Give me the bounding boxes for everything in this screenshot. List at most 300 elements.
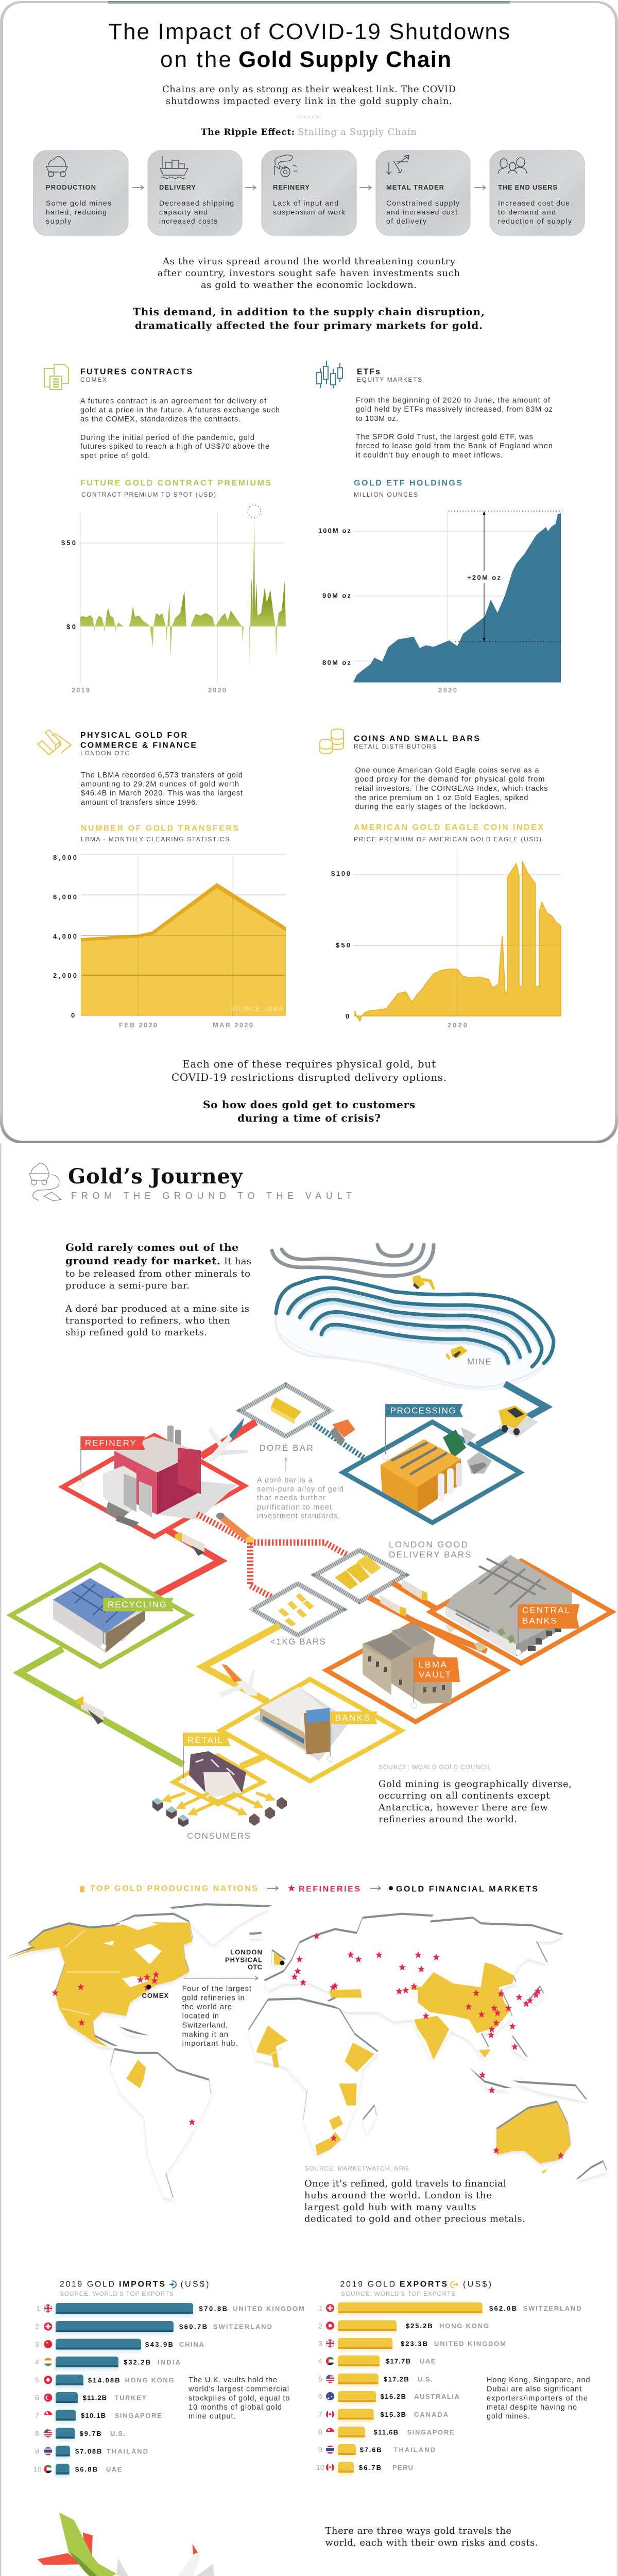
row 8: $9.7B xyxy=(80,2430,101,2437)
diamond: retail xyxy=(174,1733,263,1804)
diamond: refinery xyxy=(63,1426,244,1537)
row 4 xyxy=(35,2357,181,2367)
text: gold out of the ground: produce a semi-pure bar. xyxy=(65,1280,190,1291)
diamond: dore bar xyxy=(241,1385,330,1436)
note: hubs without mines xyxy=(487,2376,590,2421)
chart heading: SOURCE: WORLD'S TOP EXPORTS xyxy=(341,2290,455,2297)
row 5: 5 xyxy=(318,2375,322,2383)
note: hubs without mines: Hong Kong, Singapore, and xyxy=(487,2376,590,2384)
flag: central banks: CENTRAL xyxy=(522,1605,570,1615)
note: hubs without mines: exporters/importers of the xyxy=(487,2395,588,2403)
diamond: banks xyxy=(220,1680,401,1781)
card: the end users: to demand and xyxy=(498,208,556,216)
route: banks to retail xyxy=(241,1756,264,1767)
row 2: HONG KONG xyxy=(439,2322,489,2330)
row 8 xyxy=(318,2427,454,2437)
text: safe haven demand: as gold to weather the economic lockdown. xyxy=(201,280,417,291)
chart title xyxy=(354,823,543,843)
arrow xyxy=(359,185,371,190)
row 2: 2 xyxy=(318,2321,322,2330)
row 6 xyxy=(35,2392,146,2403)
text: switzerland hub note xyxy=(182,1985,251,2048)
text: gold out of the ground: transported to refiners, who then xyxy=(65,1315,230,1326)
row 7: $15.3B xyxy=(380,2411,406,2418)
ripple effect flow xyxy=(33,150,585,235)
route: 1kg bars to banks xyxy=(203,1625,280,1702)
map legend: TOP GOLD PRODUCING NATIONS xyxy=(90,1885,258,1893)
area chart: gold eagle premium: $100 xyxy=(331,870,350,877)
row 6: TURKEY xyxy=(115,2394,146,2402)
market labels: PHYSICAL xyxy=(225,1956,262,1964)
row 7 xyxy=(318,2409,449,2419)
heading: four primary markets xyxy=(133,306,485,332)
title xyxy=(108,19,510,72)
row 3: 3 xyxy=(318,2339,322,2347)
icon: airplane xyxy=(219,1664,258,1698)
row 2: SWITZERLAND xyxy=(213,2323,272,2331)
icon: truck xyxy=(76,1696,104,1724)
illustration: processing plant xyxy=(380,1427,492,1512)
flag: lbma vault xyxy=(411,1657,460,1708)
row 1: 1 xyxy=(36,2304,40,2313)
market labels: COMEX xyxy=(142,1992,168,1999)
area chart: etf holdings: 90M oz xyxy=(322,591,351,600)
section heading: gold's journey: FROM THE GROUND TO THE VAULT xyxy=(71,1191,352,1201)
text: gold mining geography: occurring on all continents except xyxy=(379,1790,550,1801)
text: financial hubs: hubs around the world. London is the xyxy=(304,2190,492,2201)
card: refinery xyxy=(262,150,356,235)
text: gold out of the ground: ship refined gold to markets. xyxy=(65,1327,207,1338)
illustration: open pit mine: MINE xyxy=(467,1357,491,1366)
row 10 xyxy=(33,2464,122,2475)
flag: processing: PROCESSING xyxy=(390,1406,456,1416)
route: mine to processing xyxy=(477,1384,546,1445)
diamond: lbma vault xyxy=(327,1622,506,1722)
area chart: gold transfers: FEB 2020 xyxy=(119,1021,157,1029)
icon: dump truck xyxy=(330,1419,355,1445)
row 2: 2 xyxy=(35,2323,39,2331)
row 4: $17.7B xyxy=(386,2358,410,2365)
row 9 xyxy=(318,2444,435,2455)
card: production: halted, reducing xyxy=(46,208,107,216)
row 5: $17.2B xyxy=(384,2375,409,2383)
chart heading: 2019 GOLD xyxy=(60,2280,114,2289)
diamond: central banks xyxy=(431,1555,612,1663)
chart title: NUMBER OF GOLD TRANSFERS xyxy=(81,824,238,833)
row 9: THAILAND xyxy=(393,2446,435,2454)
row 10: $6.8B xyxy=(75,2465,97,2473)
row 8: 8 xyxy=(318,2428,322,2436)
area chart: gold eagle premium xyxy=(331,849,561,1029)
card: production: Some gold mines xyxy=(46,199,111,207)
row 3: CHINA xyxy=(179,2341,204,2348)
area chart: futures premium xyxy=(61,505,286,694)
row 1: $70.8B xyxy=(199,2305,227,2313)
row 10: 10 xyxy=(33,2465,42,2473)
card: production xyxy=(33,150,128,235)
area chart: gold transfers xyxy=(53,854,286,1029)
area chart: futures premium: 2019 xyxy=(72,686,90,694)
row 3: UNITED KINGDOM xyxy=(434,2340,506,2347)
market labels xyxy=(142,1948,284,1999)
heading xyxy=(357,368,422,383)
arrow xyxy=(132,185,144,190)
icon: delivery trucks xyxy=(380,1579,487,1653)
text: switzerland hub note: Switzerland, xyxy=(182,2021,228,2029)
row 1: $62.0B xyxy=(489,2304,517,2312)
text: financial hubs: dedicated to gold and other precious metals. xyxy=(304,2214,525,2225)
heading: four primary markets: dramatically affected the four primary markets for gold. xyxy=(135,319,483,332)
card: metal trader: Constrained supply xyxy=(386,199,459,207)
note: uk vaults: world's largest commercial xyxy=(188,2385,289,2394)
row 6: $11.2B xyxy=(83,2394,107,2402)
route: refinery to recycling xyxy=(156,1530,220,1595)
body text xyxy=(80,397,280,460)
text: switzerland hub note: important hub. xyxy=(182,2040,238,2048)
body text: it couldn't buy enough to meet inflows. xyxy=(356,451,503,460)
text: gold out of the ground: A doré bar produced at a mine site is xyxy=(65,1303,249,1314)
text: safe haven demand: As the virus spread around the world threatening country xyxy=(162,256,456,267)
text: gold out of the ground: It has xyxy=(224,1256,251,1267)
text: gold out of the ground: ground ready for market. xyxy=(65,1255,220,1267)
row 2 xyxy=(35,2321,272,2332)
row 3: $23.3B xyxy=(401,2340,427,2347)
flag: lbma vault: VAULT xyxy=(419,1670,451,1680)
heading: FUTURES CONTRACTS xyxy=(80,368,192,376)
card: metal trader: METAL TRADER xyxy=(386,183,444,191)
diamond: london good delivery bars: DELIVERY BARS xyxy=(389,1550,471,1560)
text: financial hubs: largest gold hub with many vaults xyxy=(304,2202,476,2213)
text: physical gold required: COVID-19 restrictions disrupted delivery options. xyxy=(171,1071,447,1083)
row 4: $32.2B xyxy=(124,2359,150,2366)
text: physical gold required: Each one of these requires physical gold, but xyxy=(182,1058,436,1070)
area chart: etf holdings: 100M oz xyxy=(318,527,351,535)
text: financial hubs xyxy=(304,2165,525,2225)
row 2 xyxy=(318,2320,489,2331)
body text: The LBMA recorded 6,573 transfers of gold xyxy=(81,771,243,779)
heading xyxy=(80,368,192,383)
bar glow xyxy=(338,2304,483,2475)
route: dore bar to refinery xyxy=(201,1422,256,1456)
row 9: THAILAND xyxy=(107,2448,148,2455)
heading: PHYSICAL GOLD FOR xyxy=(80,731,187,740)
section: etfs xyxy=(317,361,562,694)
chart heading: (US$) xyxy=(463,2280,491,2289)
text: three ways gold travels xyxy=(325,2526,538,2548)
row 10: PERU xyxy=(392,2464,413,2471)
body text: A futures contract is an agreement for delivery of xyxy=(80,397,267,405)
text: three ways gold travels: world, each with their own risks and costs. xyxy=(325,2537,538,2548)
label: dore bar: A doré bar is a xyxy=(257,1477,313,1485)
heading: the ripple effect xyxy=(201,127,417,138)
area chart: etf holdings: 80M oz xyxy=(322,658,351,667)
card: metal trader: of delivery xyxy=(386,217,426,225)
note: uk vaults: 10 months of global gold xyxy=(188,2403,282,2412)
row 2: $25.2B xyxy=(406,2322,433,2330)
card: the end users: Increased cost due xyxy=(498,199,570,207)
illustration: three airplanes xyxy=(38,2513,556,2576)
flag: retail xyxy=(180,1733,231,1784)
card: production: supply xyxy=(46,217,71,225)
row 5: 5 xyxy=(35,2376,39,2384)
row 8 xyxy=(35,2428,125,2439)
heading: RETAIL DISTRIBUTORS xyxy=(354,743,436,750)
text: safe haven demand xyxy=(158,256,460,291)
text: switzerland hub note: gold refineries in xyxy=(182,1994,245,2002)
row 9: 9 xyxy=(318,2446,322,2454)
route: processing to dore bar xyxy=(306,1421,370,1460)
area chart: gold eagle premium: $50 xyxy=(336,941,350,949)
heading: four primary markets: This demand, in addition to the supply chain disruption, xyxy=(133,306,485,318)
note: uk vaults: mine output. xyxy=(188,2413,236,2421)
question text: So how does gold get to customers xyxy=(203,1098,415,1111)
text: financial hubs: Once it's refined, gold travels to financial xyxy=(304,2178,506,2189)
area chart: gold transfers: 2,000 xyxy=(53,972,77,979)
area chart: gold transfers: MAR 2020 xyxy=(213,1021,253,1029)
text: three ways gold travels: There are three ways gold travels the xyxy=(325,2526,511,2536)
chart title xyxy=(80,479,271,498)
flag: central banks xyxy=(515,1604,579,1655)
icon: mine cart to bar xyxy=(29,1163,61,1201)
row 7: $10.1B xyxy=(81,2412,106,2419)
diamond: recycling xyxy=(11,1565,190,1667)
text: gold mining geography xyxy=(378,1764,572,1825)
note: hubs without mines: gold mines. xyxy=(487,2413,530,2421)
chart heading: IMPORTS xyxy=(119,2280,165,2289)
market labels: LONDON xyxy=(230,1948,262,1956)
body text: futures spiked to reach a high of US$70 above the xyxy=(80,443,269,451)
row 7: 7 xyxy=(318,2410,322,2418)
heading: COMEX xyxy=(80,376,107,383)
label: dore bar: purification to meet xyxy=(257,1503,332,1512)
row 1: 1 xyxy=(319,2304,323,2312)
illustration: recycling plant xyxy=(53,1578,149,1653)
row 4: 4 xyxy=(35,2358,39,2366)
row 9: 9 xyxy=(35,2447,39,2455)
row 3 xyxy=(35,2339,204,2349)
question text xyxy=(203,1098,415,1124)
card: refinery: suspension of work xyxy=(273,208,346,216)
intro text: shutdowns impacted every link in the gold supply chain. xyxy=(166,96,452,107)
card: the end users: reduction of supply xyxy=(498,217,572,225)
chart title: GOLD ETF HOLDINGS xyxy=(354,479,462,487)
card: delivery: Decreased shipping xyxy=(159,199,234,207)
area chart: etf holdings: +20M oz xyxy=(467,574,501,582)
title: on the xyxy=(160,47,231,72)
route: orange to vaults xyxy=(369,1583,487,1651)
chart heading: 2019 GOLD xyxy=(340,2280,395,2289)
heading: the ripple effect: The Ripple Effect: xyxy=(201,127,295,138)
heading xyxy=(80,731,196,757)
chart heading xyxy=(340,2280,491,2297)
illustration: vault building xyxy=(363,1624,453,1704)
section heading: gold's journey: Gold’s Journey xyxy=(68,1164,244,1189)
diamond: 1kg bars xyxy=(253,1584,343,1647)
diamond: london good delivery bars: LONDON GOOD xyxy=(389,1540,468,1550)
flag: processing xyxy=(383,1404,463,1460)
flag: retail: RETAIL xyxy=(187,1735,222,1745)
text: gold out of the ground: Gold rarely comes out of the xyxy=(65,1241,238,1253)
area chart: etf holdings xyxy=(318,511,562,694)
icon: coin stacks xyxy=(320,729,344,754)
row 8: 8 xyxy=(35,2429,39,2437)
row 4: UAE xyxy=(420,2358,436,2365)
text: switzerland hub note: Four of the largest xyxy=(182,1985,251,1993)
row 10: 10 xyxy=(316,2463,324,2471)
heading: the ripple effect: Stalling a Supply Chain xyxy=(298,127,417,138)
label: dore bar: investment standards. xyxy=(257,1512,340,1520)
chart title: LBMA - MONTHLY CLEARING STATISTICS xyxy=(81,836,229,843)
row 7: CANADA xyxy=(414,2411,449,2418)
row 10 xyxy=(316,2462,413,2473)
arrow xyxy=(474,185,486,190)
row 3: 3 xyxy=(35,2340,39,2348)
chart heading: (US$) xyxy=(180,2280,209,2289)
chart title xyxy=(81,824,238,843)
body text: One ounce American Gold Eagle coins serve as a xyxy=(355,767,539,775)
row 3: $43.9B xyxy=(145,2341,173,2348)
panel: supply chain impact xyxy=(0,1,618,1143)
body text: amount of transfers since 1996. xyxy=(81,799,198,807)
map legend xyxy=(80,1885,538,1894)
row 5 xyxy=(318,2374,433,2384)
section: futures contracts xyxy=(44,365,286,694)
area chart: etf holdings: 2020 xyxy=(438,686,457,694)
chart title: CONTRACT PREMIUM TO SPOT (USD) xyxy=(81,491,216,498)
row 2: $60.7B xyxy=(179,2323,207,2331)
note: hubs without mines: metal despite having no xyxy=(487,2403,577,2412)
body text: retail investors. The COINGEAG Index, which tracks xyxy=(355,785,548,793)
note: uk vaults: The U.K. vaults hold the xyxy=(188,2376,277,2384)
icon: candlesticks xyxy=(317,361,342,388)
consumers: CONSUMERS xyxy=(187,1831,250,1841)
row 10: $6.7B xyxy=(359,2464,381,2471)
body text: good proxy for the demand for physical gold from xyxy=(355,775,545,784)
arrow xyxy=(245,185,256,190)
row 4 xyxy=(318,2355,436,2366)
row 8: U.S. xyxy=(110,2430,125,2437)
consumers xyxy=(152,1793,287,1841)
diamond: london good delivery bars xyxy=(315,1540,471,1602)
body text: to 103M oz. xyxy=(356,415,398,423)
icon: futures documents xyxy=(44,365,68,389)
card: refinery: Lack of input and xyxy=(273,199,338,207)
row 1: UNITED KINGDOM xyxy=(233,2305,304,2313)
row 10: UAE xyxy=(106,2465,122,2473)
row 7: 7 xyxy=(35,2411,39,2419)
area chart: gold eagle premium: 2020 xyxy=(448,1021,467,1029)
text: financial hubs: SOURCE: MARKETWATCH, NRG xyxy=(305,2165,409,2172)
illustration: central bank xyxy=(445,1555,572,1656)
bar chart: 2019 gold exports xyxy=(316,2280,590,2475)
body text xyxy=(356,397,553,460)
area chart: gold transfers: 0 xyxy=(71,1011,75,1019)
body text: The SPDR Gold Trust, the largest gold ETF, was xyxy=(356,433,533,442)
title: Gold Supply Chain xyxy=(238,47,451,72)
icon: rotary kiln xyxy=(216,1513,254,1543)
body text: as the COMEX, standardizes the contracts. xyxy=(80,415,241,423)
heading: COMMERCE & FINANCE xyxy=(80,741,196,750)
route: recycling to retail xyxy=(20,1649,183,1765)
text: switzerland hub note: the world are xyxy=(182,2003,232,2011)
body text: $46.4B in March 2020. This was the largest xyxy=(81,789,243,798)
body text xyxy=(355,767,548,811)
card: delivery: capacity and xyxy=(159,208,208,216)
text: gold mining geography: Antarctica, however there are few xyxy=(378,1802,548,1813)
illustration: open pit mine xyxy=(272,1245,556,1389)
text: gold mining geography: Gold mining is geographically diverse, xyxy=(379,1779,572,1790)
card: delivery: DELIVERY xyxy=(159,183,196,191)
map legend: GOLD FINANCIAL MARKETS xyxy=(396,1885,538,1894)
text: gold out of the ground: to be released from other minerals to xyxy=(65,1268,250,1279)
row 5: HONG KONG xyxy=(125,2376,174,2384)
card: production: PRODUCTION xyxy=(46,183,96,191)
world map xyxy=(6,1903,607,2202)
card: metal trader xyxy=(376,150,470,235)
note: uk vaults xyxy=(188,2376,289,2421)
text: physical gold required xyxy=(171,1058,447,1083)
flag: banks xyxy=(328,1711,377,1762)
icon: truck xyxy=(175,1532,204,1556)
arrow xyxy=(184,1976,258,1980)
card: metal trader: and increased cost xyxy=(386,208,457,216)
heading: LONDON OTC xyxy=(80,750,129,757)
row 1: SWITZERLAND xyxy=(523,2304,581,2312)
row 8: SINGAPORE xyxy=(407,2429,454,2436)
flag: central banks: BANKS xyxy=(522,1616,557,1626)
text: safe haven demand: after country, investors sought safe haven investments such xyxy=(158,268,460,279)
body text: amounting to 29.2M ounces of gold worth xyxy=(81,781,239,789)
card: the end users: THE END USERS xyxy=(498,183,557,191)
bar chart: 2019 gold imports xyxy=(33,2280,304,2477)
area chart: gold eagle premium: 0 xyxy=(346,1012,349,1020)
area chart: gold transfers: 6,000 xyxy=(53,893,77,901)
routes: dashed bar routes xyxy=(197,1514,349,1597)
text: gold mining geography: refineries around the world. xyxy=(379,1814,517,1825)
section: physical gold xyxy=(38,730,286,1029)
row 3 xyxy=(318,2338,506,2349)
body text: forced to lease gold from the Bank of England when xyxy=(356,442,553,450)
text: switzerland hub note: making it an xyxy=(182,2031,228,2039)
intro text: Chains are only as strong as their weakest link. The COVID xyxy=(162,84,456,95)
flag: recycling: RECYCLING xyxy=(108,1600,166,1609)
body text xyxy=(81,771,243,807)
body text: gold at a price in the future. A futures exchange such xyxy=(80,406,280,414)
section heading: gold's journey xyxy=(29,1163,352,1201)
body text: the price premium on 1 oz Gold Eagles, spiked xyxy=(355,794,528,802)
chart heading xyxy=(60,2280,209,2297)
body text: spot price of gold. xyxy=(80,452,150,460)
note: uk vaults: stockpiles of gold, equal to xyxy=(188,2395,289,2403)
label: dore bar xyxy=(257,1443,344,1520)
card: the end users xyxy=(490,150,585,235)
row 6: $16.2B xyxy=(380,2393,406,2400)
chart title: FUTURE GOLD CONTRACT PREMIUMS xyxy=(80,479,271,487)
body text: during the early stages of the lockdown. xyxy=(355,803,507,811)
intro text xyxy=(162,84,456,107)
chart heading: EXPORTS xyxy=(400,2280,447,2289)
icon: haul truck xyxy=(497,1405,538,1437)
body text: From the beginning of 2020 to June, the amount of xyxy=(356,397,551,405)
label: dore bar: that needs further xyxy=(257,1494,325,1502)
label: dore bar: DORÉ BAR xyxy=(260,1443,313,1453)
icon: gold bars xyxy=(38,730,71,755)
row 9 xyxy=(35,2446,148,2456)
illustration: retail store xyxy=(189,1751,246,1798)
row 4: 4 xyxy=(318,2357,322,2365)
row 9: $7.08B xyxy=(75,2448,101,2455)
row 8: $11.6B xyxy=(374,2429,398,2436)
